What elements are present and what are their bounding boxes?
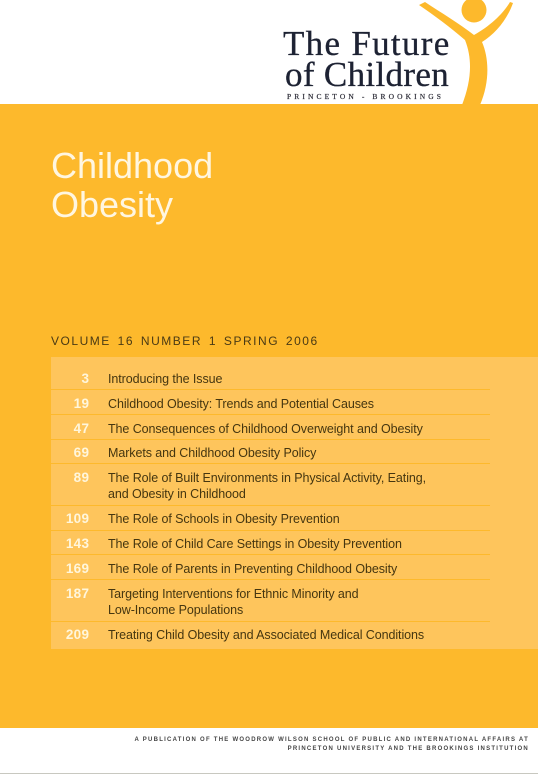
logo subtitle: Princeton - Brookings: PRINCETON - BROOKINGS: [287, 92, 444, 101]
contents row 8: The Role of Parents in Preventing Childhood Obesity: [108, 562, 397, 576]
contents row 10: Treating Child Obesity and Associated Medical Conditions: [108, 628, 424, 642]
contents row 5: 89: [74, 470, 89, 485]
icon: raised arms figure logo: [419, 0, 513, 104]
contents row 2: Childhood Obesity: Trends and Potential Causes: [108, 397, 374, 411]
contents row 7: 143: [66, 536, 89, 551]
contents row 9: 187: [66, 586, 89, 601]
contents row 5: and Obesity in Childhood: [108, 487, 246, 501]
contents row 10: 209: [66, 627, 89, 642]
contents row 8: 169: [66, 561, 89, 576]
contents row 4: 69: [74, 445, 89, 460]
contents row 3: 47: [74, 420, 89, 436]
contents row 9: Targeting Interventions for Ethnic Minority and: [108, 587, 359, 601]
contents row 7: The Role of Child Care Settings in Obesity Prevention: [108, 537, 402, 551]
volume line: VOLUME 16 NUMBER 1 SPRING 2006: [51, 334, 319, 348]
contents row 9: [66, 586, 359, 617]
contents row 9: Low-Income Populations: [108, 603, 243, 617]
main title: Childhood Obesity: Childhood: [51, 144, 213, 186]
logo title: The Future of Children: [283, 24, 451, 94]
contents row 1: Introducing the Issue: [108, 372, 222, 386]
main title: Childhood Obesity: Obesity: [51, 184, 173, 224]
panel: table of contents: [51, 357, 538, 649]
contents row 2: 19: [74, 396, 89, 411]
contents row 3: The Consequences of Childhood Overweight and Obesity: [108, 422, 423, 436]
contents row 6: 109: [66, 511, 89, 526]
contents row 5: [74, 470, 426, 501]
contents row 6: The Role of Schools in Obesity Prevention: [108, 512, 340, 526]
footer publisher note: A PUBLICATION OF THE WOODROW WILSON SCHOOL OF PUBLIC AND INTERNATIONAL AFFAIRS AT: [135, 737, 529, 743]
contents row 5: The Role of Built Environments in Physical Activity, Eating,: [108, 471, 426, 485]
footer publisher note: [134, 736, 529, 752]
main title: Childhood Obesity: [51, 144, 213, 224]
contents row 1: 3: [81, 371, 89, 386]
footer publisher note: PRINCETON UNIVERSITY AND THE BROOKINGS INSTITUTION: [288, 746, 529, 752]
contents row 4: Markets and Childhood Obesity Policy: [108, 446, 316, 460]
logo title: The Future of Children: of Children: [285, 55, 449, 94]
logo title: The Future of Children: The Future: [283, 24, 451, 63]
